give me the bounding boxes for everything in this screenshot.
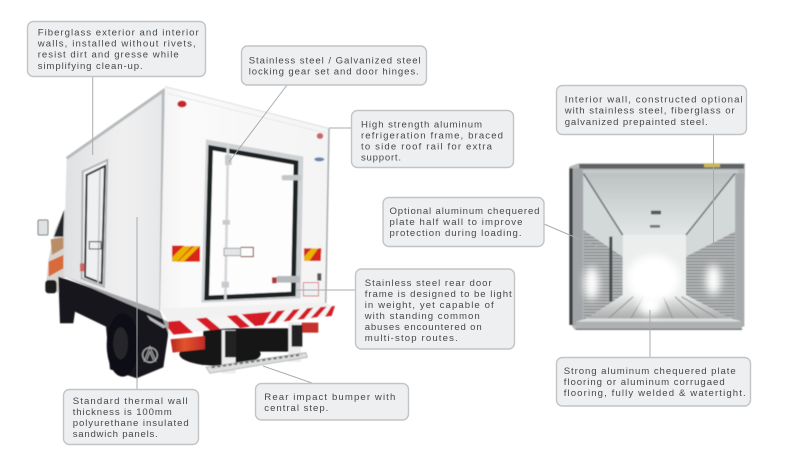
callout: flooring: Strong aluminum chequered plate [564,366,736,377]
side door [80,160,107,287]
callout: interior wall: with stainless steel, fiberglass or [564,106,735,117]
callout: locking gear [242,46,426,85]
marker lamps [177,101,187,107]
callout: wall thickness: sandwich panels. [73,429,158,440]
callout: half wall: protection during loading. [390,228,522,239]
callout: exterior walls: Fiberglass exterior and interior [38,28,199,39]
truck photo [38,87,335,378]
callout: wall thickness: thickness is 100mm [73,407,172,418]
callout: flooring: flooring or aluminum corrugaed [564,377,725,388]
callout: rear door frame: abuses encountered on [365,322,482,333]
reflective bumper stripe [168,306,335,335]
floor [583,295,735,321]
callout: exterior walls: simplifying clean-up. [38,61,143,72]
callout: flooring: flooring, fully welded & watertight. [564,388,746,399]
far wall [623,235,686,295]
callout: rear door frame: in weight, yet capable of [365,300,494,311]
truck cab [38,208,65,293]
left wall [583,173,623,320]
callout: rear door frame: with standing common [364,311,480,322]
callout: wall thickness: polyurethane insulated [73,418,189,429]
callout: interior wall [556,86,746,134]
callout: rear door frame: Stainless steel rear door [365,278,492,289]
callout: rear door frame: frame is designed to be light [365,289,512,300]
leader lines [93,77,713,389]
callout: wall thickness: Standard thermal wall [73,396,188,407]
callout: rear bumper: central step. [264,403,328,414]
rear impact bumper [206,322,307,373]
reflector panels [172,246,321,262]
callout: half wall: Optional aluminum chequered [390,206,540,217]
callout: rear door frame: multi-stop routes. [365,333,458,344]
callout: exterior walls [28,22,206,76]
callout: locking gear: locking gear set and door hinges. [249,66,419,77]
callout: rear bumper [256,384,408,420]
rear wall [160,87,329,311]
callout: exterior walls: walls, installed without rivets, [37,39,196,50]
callout: half wall: plate half wall to improve [390,217,522,228]
callout: rear bumper: Rear impact bumper with [264,392,395,403]
side wall [63,91,163,311]
chassis and wheels [58,277,290,378]
interior photo [569,163,745,330]
rear door [201,139,321,303]
callout: refrigeration frame: to side roof rail for extra [361,141,493,152]
callout: flooring [556,358,750,406]
ceiling [585,173,735,235]
callout: refrigeration frame: support. [361,152,401,163]
callout: interior wall: Interior wall, constructed optional [565,95,743,106]
callout: wall thickness [64,390,198,444]
callout: exterior walls: resist dirt and gresse while [38,50,179,61]
tail lamps [171,336,205,353]
callout: refrigeration frame [352,110,514,168]
right wall [686,173,735,320]
callout: rear door frame [356,269,514,349]
callout: half wall [383,198,544,246]
callout: locking gear: Stainless steel / Galvanized steel [249,55,421,66]
callout: interior wall: galvanized prepainted steel. [565,117,708,128]
callout: refrigeration frame: refrigeration frame, braced [361,130,503,141]
callout: refrigeration frame: High strength aluminum [361,119,482,130]
